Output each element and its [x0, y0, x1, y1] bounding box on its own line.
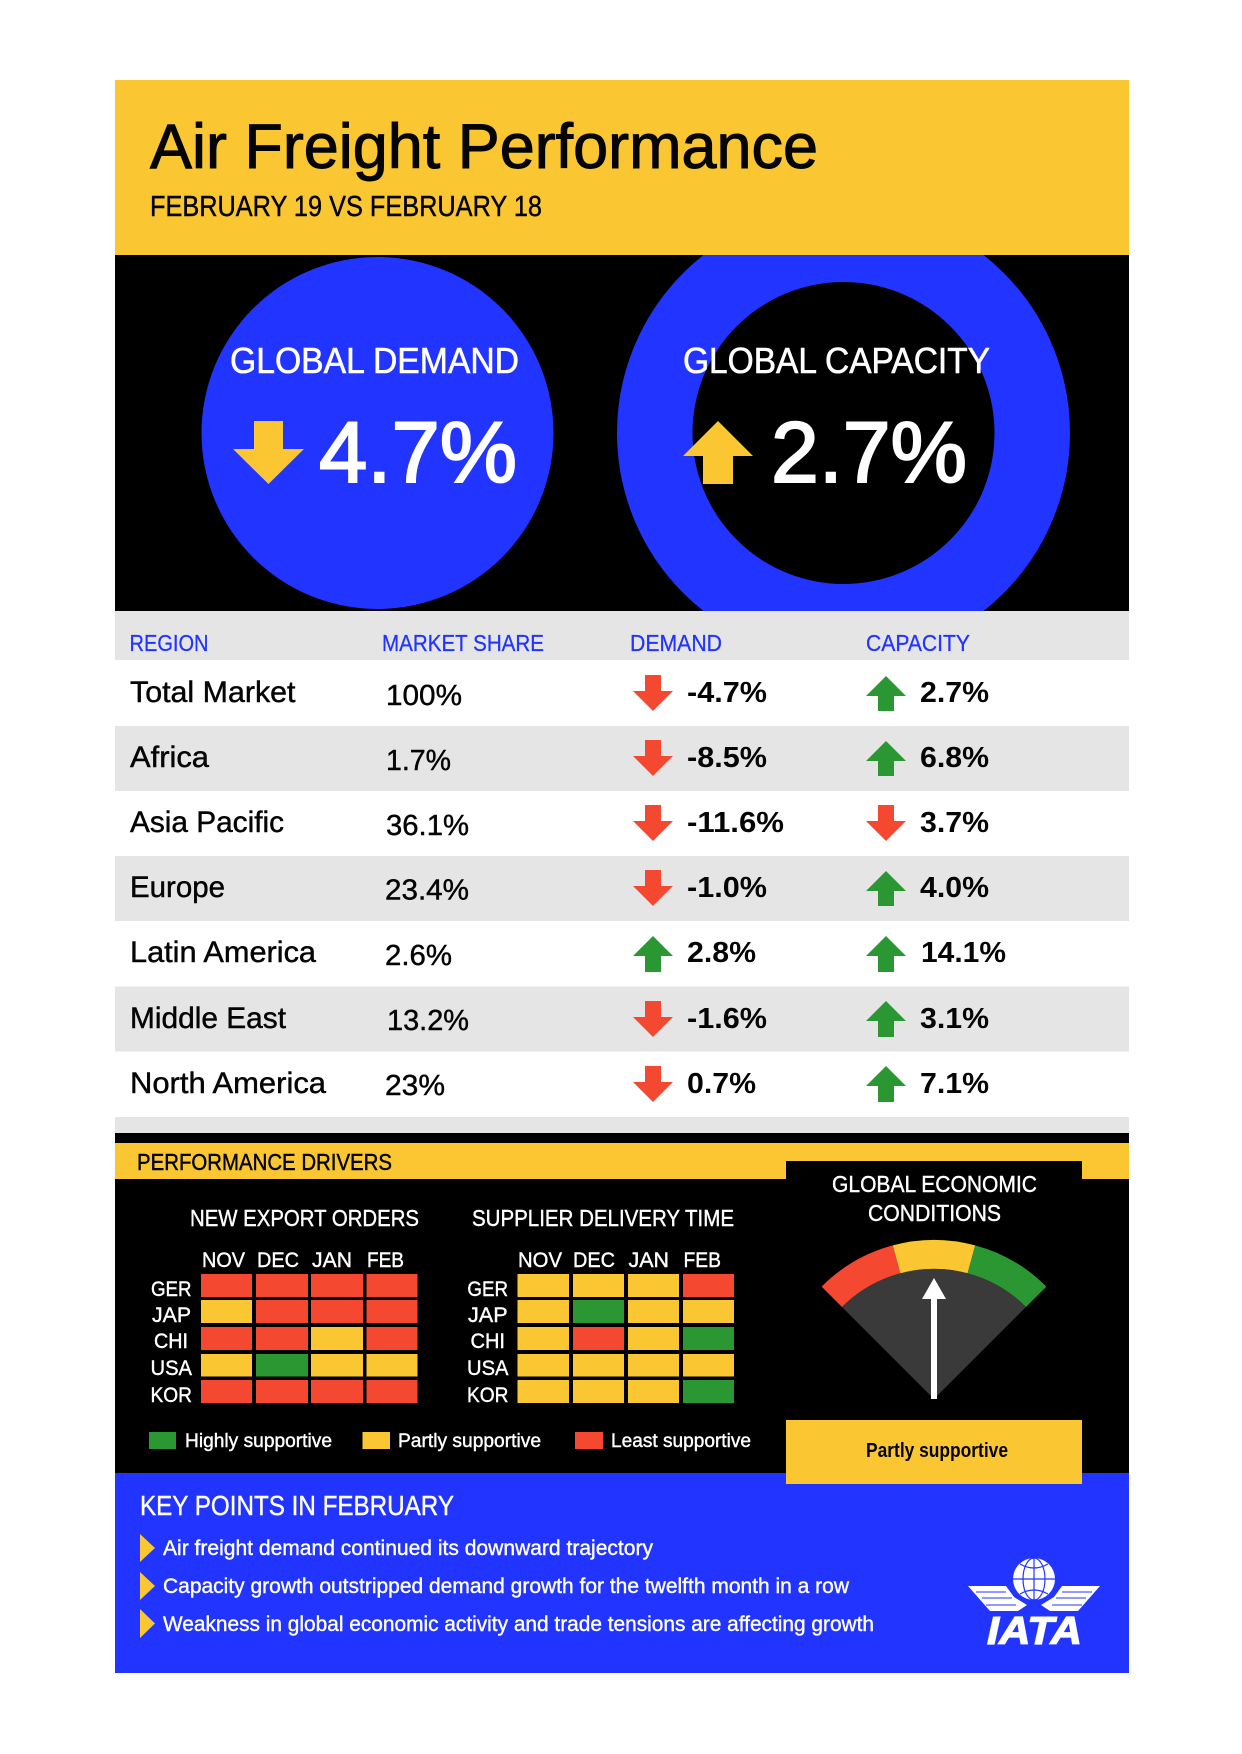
heatmap: new export orders: GER — [151, 1278, 192, 1301]
row: Africa: Africa — [130, 741, 209, 774]
row: Latin America: 2.8% — [687, 937, 756, 969]
title: Air Freight Performance — [150, 112, 818, 182]
global capacity value: 2.7% — [771, 405, 967, 501]
heatmap: new export orders: FEB — [367, 1249, 404, 1272]
table header: CAPACITY — [866, 630, 970, 656]
global capacity ring — [655, 244, 1032, 622]
row: Asia Pacific: Asia Pacific — [130, 806, 284, 839]
row: Total Market: Total Market — [130, 676, 296, 709]
global demand heading: GLOBAL DEMAND — [230, 340, 519, 381]
row: Latin America: 14.1% — [921, 937, 1006, 969]
heatmap: supplier delivery time: USA — [467, 1357, 508, 1380]
bullet 2: Capacity growth outstripped demand growth for the twelfth month in a row — [163, 1574, 849, 1598]
row: Europe: 4.0% — [920, 872, 989, 904]
legend — [149, 1431, 751, 1452]
icon: IATA logo — [968, 1558, 1100, 1653]
row: Middle East: 13.2% — [387, 1005, 469, 1037]
row: Latin America: Latin America — [130, 936, 316, 969]
heatmap: supplier delivery time: GER — [467, 1278, 508, 1301]
heatmap: supplier delivery time: DEC — [573, 1249, 615, 1272]
performance drivers banner — [115, 1143, 1129, 1179]
panel: global economic conditions — [786, 1161, 1082, 1484]
row: Europe: 23.4% — [385, 874, 469, 906]
heatmap: new export orders: CHI — [154, 1330, 188, 1353]
heatmap: supplier delivery time: JAN — [628, 1249, 669, 1272]
global demand value: 4.7% — [319, 405, 517, 501]
row: Total Market — [115, 660, 1129, 726]
gauge needle arrow — [922, 1278, 946, 1399]
gauge heading: GLOBAL ECONOMIC — [832, 1171, 1037, 1197]
row: Latin America: 2.6% — [385, 940, 452, 972]
row: Total Market: 2.7% — [920, 677, 989, 709]
legend: Partly supportive — [398, 1431, 541, 1452]
global capacity heading: GLOBAL CAPACITY — [683, 340, 990, 381]
panel: key points — [115, 1473, 1129, 1673]
heatmap: new export orders — [150, 1205, 419, 1407]
gauge status box — [786, 1420, 1082, 1484]
heatmap: new export orders: KOR — [150, 1384, 192, 1407]
row: Middle East: -1.6% — [687, 1003, 767, 1035]
panel: performance drivers — [115, 1133, 1129, 1473]
heatmap: supplier delivery time: NOV — [518, 1249, 562, 1272]
bullet 3: Weakness in global economic activity and trade tensions are affecting growth — [163, 1612, 874, 1636]
key points heading: KEY POINTS IN FEBRUARY — [140, 1490, 454, 1521]
table header: DEMAND — [630, 630, 722, 656]
row: North America — [115, 1052, 1129, 1117]
row: North America: 7.1% — [920, 1068, 989, 1100]
row: Middle East: 3.1% — [920, 1003, 989, 1035]
icon: demand down arrow — [233, 421, 304, 484]
row: Europe: Europe — [130, 871, 225, 904]
heatmap: new export orders: USA — [150, 1357, 192, 1380]
icon: capacity up arrow — [683, 421, 753, 484]
row: Middle East — [115, 986, 1129, 1052]
heatmap: new export orders: DEC — [257, 1249, 299, 1272]
heatmap: supplier delivery time: SUPPLIER DELIVERY TIME — [472, 1205, 734, 1231]
gauge status box: Partly supportive — [866, 1440, 1008, 1462]
heatmap: new export orders: NOV — [202, 1249, 245, 1272]
gauge heading — [832, 1171, 1037, 1226]
row: Africa: 1.7% — [386, 745, 451, 777]
subtitle: FEBRUARY 19 VS FEBRUARY 18 — [150, 191, 542, 223]
gauge heading: CONDITIONS — [868, 1200, 1001, 1226]
legend: Highly supportive — [185, 1431, 332, 1452]
row: Africa: 6.8% — [920, 742, 989, 774]
row: Asia Pacific — [115, 791, 1129, 856]
row: Asia Pacific: -11.6% — [687, 807, 784, 839]
panel: regional table — [115, 611, 1129, 1133]
heatmap: supplier delivery time: JAP — [468, 1304, 508, 1327]
row: Middle East: Middle East — [130, 1002, 287, 1035]
table header — [115, 611, 1129, 660]
row: Asia Pacific: 36.1% — [386, 810, 469, 842]
row: North America: 23% — [385, 1070, 445, 1102]
row: Africa — [115, 726, 1129, 791]
row: Latin America — [115, 921, 1129, 986]
row: North America: North America — [130, 1067, 326, 1100]
legend: Least supportive — [611, 1431, 751, 1452]
row: Total Market: -4.7% — [687, 677, 767, 709]
heatmap: supplier delivery time — [467, 1205, 734, 1407]
header panel — [115, 80, 1129, 255]
row: Europe: -1.0% — [687, 872, 767, 904]
row: Africa: -8.5% — [687, 742, 767, 774]
table header: REGION — [130, 630, 208, 656]
row: Europe — [115, 856, 1129, 921]
row: North America: 0.7% — [687, 1068, 756, 1100]
icon: IATA logo: IATA — [987, 1610, 1082, 1653]
heatmap: supplier delivery time: FEB — [684, 1249, 721, 1272]
row: Total Market: 100% — [386, 680, 462, 712]
global demand circle — [202, 257, 554, 609]
heatmap: new export orders: NEW EXPORT ORDERS — [190, 1205, 419, 1231]
heatmap: supplier delivery time: CHI — [470, 1330, 505, 1353]
heatmap: new export orders: JAP — [152, 1304, 191, 1327]
row: Asia Pacific: 3.7% — [920, 807, 989, 839]
panel: global headline figures — [115, 244, 1129, 622]
heatmap: supplier delivery time: KOR — [467, 1384, 508, 1407]
bullet 1: Air freight demand continued its downward trajectory — [163, 1536, 653, 1560]
table header: MARKET SHARE — [382, 630, 544, 656]
performance drivers banner: PERFORMANCE DRIVERS — [137, 1149, 392, 1175]
gauge — [822, 1240, 1046, 1399]
heatmap: new export orders: JAN — [312, 1249, 352, 1272]
